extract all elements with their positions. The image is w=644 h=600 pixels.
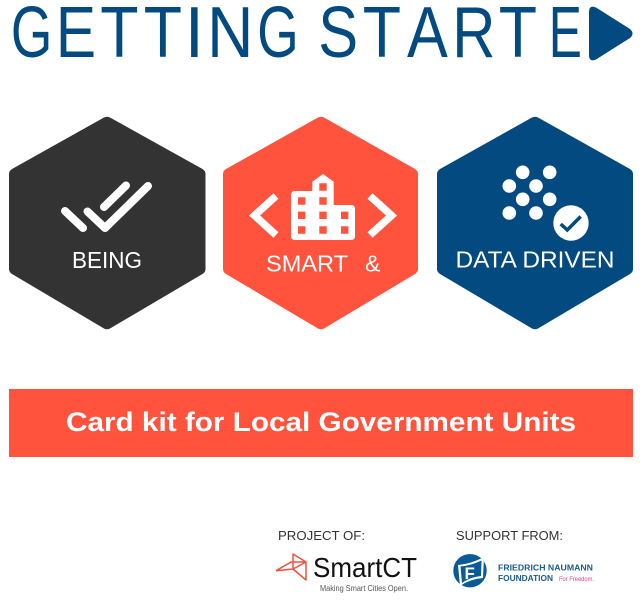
panel: smart hexagon: & — [365, 250, 380, 276]
logo: fnf slogan: For Freedom. — [559, 577, 594, 583]
banner text: Card kit for Local Government Units — [66, 407, 576, 437]
logo: fnf emblem: F — [464, 564, 475, 583]
banner — [9, 389, 633, 457]
logo: fnf emblem — [453, 554, 487, 587]
support from credit: FOUNDATION — [498, 573, 553, 583]
icon: building — [291, 174, 355, 240]
panel: being hexagon — [9, 117, 206, 329]
title — [11, 0, 632, 73]
logo: fnf wordmark: FRIEDRICH NAUMANN — [498, 562, 593, 572]
panel: data driven hexagon — [437, 117, 633, 329]
support from credit — [453, 528, 594, 587]
icon: check badge — [553, 205, 589, 241]
icon: data dots — [502, 166, 556, 220]
icon: play triangle — [589, 7, 632, 60]
logo: smartct mark — [276, 554, 306, 580]
label: being: BEING — [72, 247, 142, 273]
label: smart and: SMART — [266, 250, 348, 276]
icon: left code bracket — [254, 196, 276, 235]
label: data driven: DATA DRIVEN — [456, 247, 614, 273]
logo: smartct tagline: Making Smart Cities Open. — [320, 584, 408, 593]
heading: project of: PROJECT OF: — [278, 528, 365, 543]
logo: smartct wordmark: SmartCT — [313, 552, 417, 583]
heading: support from: SUPPORT FROM: — [456, 528, 563, 543]
project of credit — [276, 528, 417, 593]
icon: double check — [65, 186, 148, 228]
panel: smart hexagon — [223, 117, 418, 329]
icon: right code bracket — [370, 196, 392, 235]
